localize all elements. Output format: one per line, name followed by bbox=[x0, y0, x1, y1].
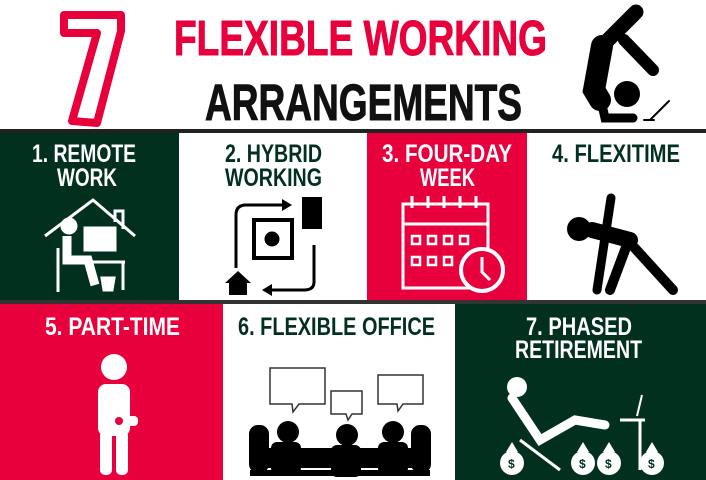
panel: remote work bbox=[0, 133, 179, 300]
icon: reclining person with money bags bbox=[500, 377, 664, 475]
panel: phased retirement: RETIREMENT bbox=[515, 336, 642, 364]
number 7 bbox=[64, 15, 121, 123]
panel: phased retirement: $ bbox=[579, 457, 586, 471]
icon: calendar clock bbox=[403, 196, 503, 291]
panel: part-time: 5. PART-TIME bbox=[45, 313, 180, 341]
panel: four-day week bbox=[367, 133, 527, 300]
panel: flexitime bbox=[528, 133, 706, 300]
panel: flexitime: 4. FLEXITIME bbox=[552, 140, 680, 168]
panel: hybrid working: WORKING bbox=[225, 164, 322, 192]
panel: hybrid working bbox=[181, 133, 366, 300]
panel: remote work: WORK bbox=[57, 164, 117, 192]
icon: headstand person bbox=[594, 12, 669, 120]
panel: part-time bbox=[0, 304, 223, 480]
icon: home office bbox=[45, 200, 135, 292]
title line 2: ARRANGEMENTS bbox=[205, 74, 522, 131]
panel: four-day week: WEEK bbox=[420, 164, 475, 192]
panel: phased retirement: $ bbox=[605, 457, 612, 471]
panel: phased retirement: $ bbox=[508, 457, 515, 471]
panel: phased retirement: $ bbox=[648, 457, 655, 471]
panel: phased retirement bbox=[455, 304, 706, 480]
panel: flexible office: 6. FLEXIBLE OFFICE bbox=[238, 313, 435, 341]
icon: hybrid cycle bbox=[225, 197, 322, 296]
panel: hybrid working: 2. HYBRID bbox=[225, 140, 322, 168]
panel: flexible office bbox=[225, 304, 454, 480]
icon: stretching figure bbox=[567, 198, 673, 290]
panel: four-day week: 3. FOUR-DAY bbox=[382, 140, 512, 168]
panel: remote work: 1. REMOTE bbox=[32, 140, 136, 168]
divider line bbox=[0, 129, 706, 133]
panel: phased retirement: 7. PHASED bbox=[526, 313, 632, 341]
icon: person with watch bbox=[98, 354, 138, 475]
title line 1: FLEXIBLE WORKING bbox=[174, 12, 547, 66]
icon: speech bubbles and sofa bbox=[249, 368, 431, 477]
